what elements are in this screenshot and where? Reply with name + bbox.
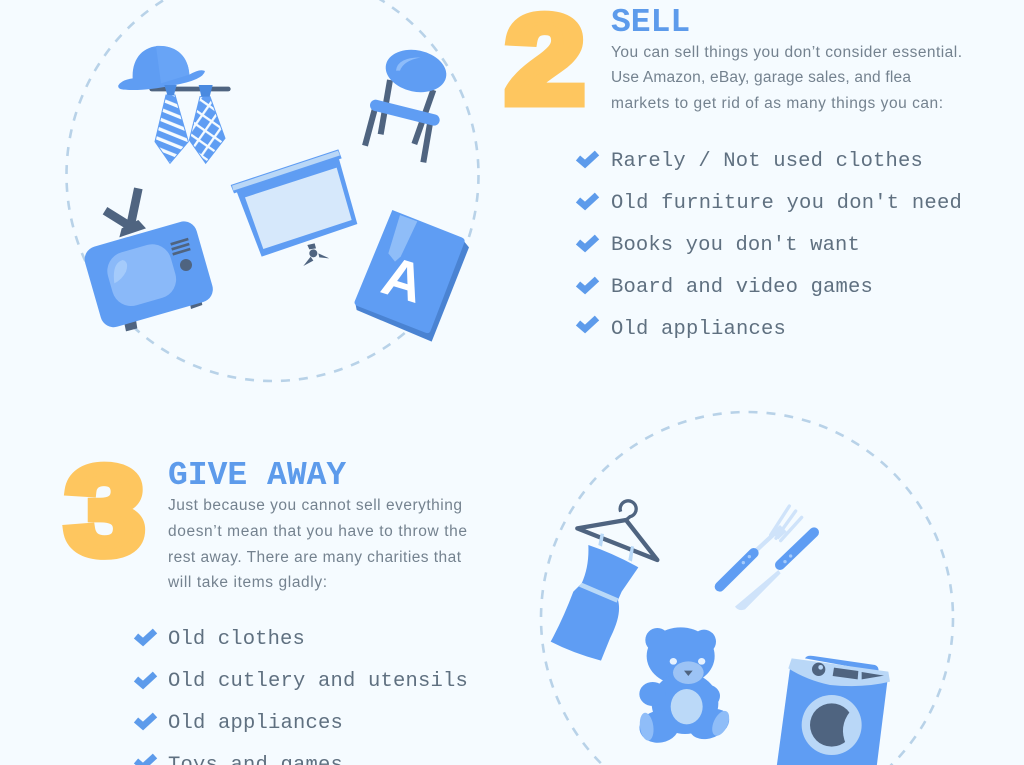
heading: give away: GIVE AWAY bbox=[168, 457, 346, 494]
checklist: sell: Old furniture you don't need bbox=[611, 192, 962, 215]
panel: sell illustration bbox=[66, 0, 478, 381]
description: sell: Use Amazon, eBay, garage sales, and flea bbox=[611, 69, 911, 86]
icon: washing machine bbox=[777, 656, 890, 765]
description: sell: You can sell things you don’t consider essential. bbox=[611, 44, 962, 61]
checklist: sell: Old appliances bbox=[611, 318, 786, 341]
icon: projector screen bbox=[231, 149, 357, 266]
description: give away: will take items gladly: bbox=[167, 574, 327, 591]
description: give away: Just because you cannot sell everything bbox=[168, 497, 462, 514]
icon: dress on hanger bbox=[551, 501, 657, 661]
icon: teddy bear bbox=[637, 627, 734, 746]
dashed circle: give away bbox=[541, 412, 953, 765]
icon: television bbox=[82, 188, 216, 331]
description: sell: markets to get rid of as many things you can: bbox=[611, 95, 943, 112]
letter A: A bbox=[375, 244, 431, 315]
number 3: 3 bbox=[66, 443, 144, 580]
checklist: give away bbox=[136, 628, 468, 765]
icon: book bbox=[355, 210, 469, 342]
checklist: give away: Old appliances bbox=[168, 712, 343, 735]
checklist: give away: Old clothes bbox=[168, 628, 305, 651]
panel: give away illustration bbox=[541, 412, 953, 765]
icon: chair bbox=[365, 44, 450, 162]
panel: give away text bbox=[66, 443, 468, 765]
checklist: sell: Rarely / Not used clothes bbox=[611, 150, 923, 173]
panel: sell text bbox=[506, 0, 962, 341]
icons: sell bbox=[82, 44, 469, 342]
description: give away: doesn’t mean that you have to throw the bbox=[168, 523, 467, 540]
icons: give away bbox=[551, 501, 890, 765]
description: give away: rest away. There are many charities that bbox=[168, 549, 462, 566]
checklist: sell bbox=[578, 150, 962, 341]
icon: hat and ties on rail bbox=[118, 46, 228, 163]
checklist: give away: Old cutlery and utensils bbox=[168, 670, 468, 693]
dashed circle: sell bbox=[66, 0, 478, 381]
checklist: sell: Books you don't want bbox=[611, 234, 860, 257]
description: sell bbox=[611, 44, 962, 112]
description: give away bbox=[167, 497, 467, 591]
icon: fork and knife bbox=[720, 506, 814, 610]
heading: sell: SELL bbox=[611, 4, 690, 41]
checklist: sell: Board and video games bbox=[611, 276, 873, 299]
